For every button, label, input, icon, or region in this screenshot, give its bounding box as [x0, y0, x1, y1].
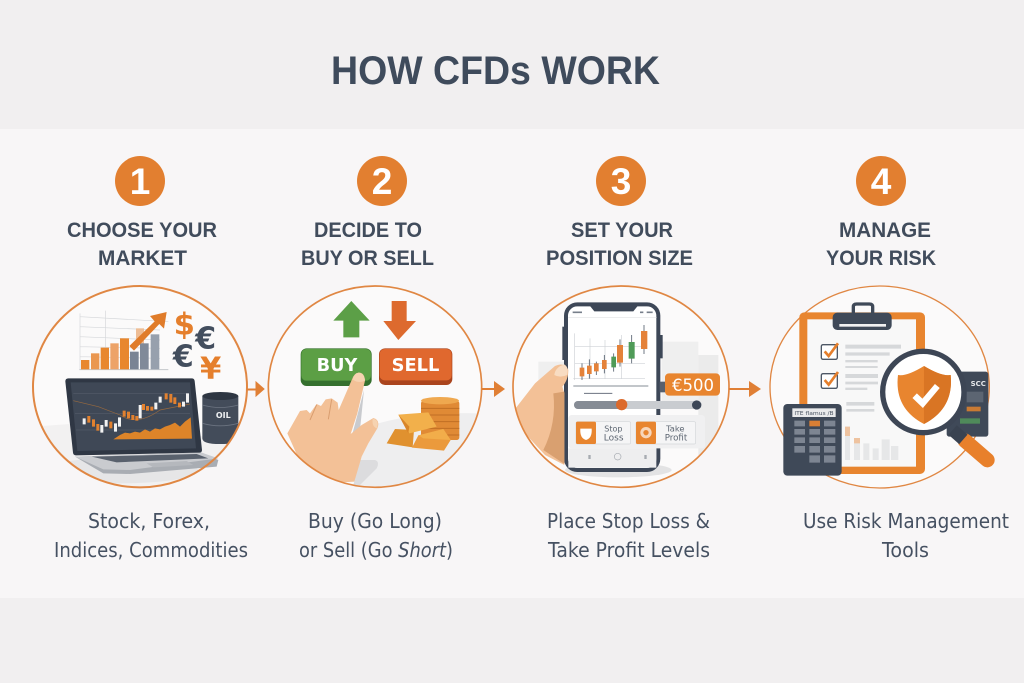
title: HOW CFDs WORK: [331, 49, 660, 93]
currency symbols: [172, 308, 221, 386]
step 1 heading: CHOOSE YOUR: [67, 219, 217, 242]
step 2 heading: DECIDE TO: [314, 219, 422, 242]
step 3 number badge: 3: [611, 161, 631, 202]
step 3 heading: [546, 219, 693, 270]
left calculator: ITE flamus /B: [794, 411, 834, 417]
euro amount badge: €500: [672, 376, 714, 395]
step 1 description: Stock, Forex,: [88, 509, 210, 533]
step 1 heading: [67, 219, 217, 270]
arrow 3 to 4: [729, 381, 761, 397]
step 2 heading: BUY OR SELL: [301, 247, 434, 270]
down arrow: [383, 301, 416, 340]
step 4 number badge: [856, 156, 906, 206]
illustration 1: market circle: [33, 286, 253, 493]
step 4 heading: YOUR RISK: [826, 247, 936, 270]
step 3 description: Place Stop Loss &: [547, 509, 710, 533]
step 2 description: or Sell (Go Short): [299, 538, 453, 562]
right calculator behind magnifier: [947, 372, 988, 437]
step 1 number badge: [115, 156, 165, 206]
illustration 4: risk management circle: [770, 286, 989, 488]
sell button: [379, 348, 452, 385]
candlestick chart: [573, 325, 648, 393]
sell button: SELL: [392, 356, 439, 376]
step 4 heading: MANAGE: [839, 219, 931, 242]
step 1 number badge: 1: [130, 161, 150, 202]
position size slider: [574, 399, 702, 410]
currency symbols: $: [174, 308, 195, 343]
step 2 number badge: 2: [372, 161, 392, 202]
stop loss and take profit panel: [568, 415, 705, 448]
step 2 description: [299, 509, 453, 562]
step 3 heading: POSITION SIZE: [546, 247, 693, 270]
step 1 description: Indices, Commodities: [54, 538, 248, 562]
clipboard: [799, 304, 925, 474]
step 2 number badge: [357, 156, 407, 206]
circle outline: [268, 286, 482, 487]
step 4 heading: [826, 219, 936, 270]
circle outline: [513, 286, 729, 487]
oil barrel: [202, 392, 238, 444]
laptop with trading chart: [65, 378, 218, 474]
stop loss and take profit panel: Loss: [604, 434, 624, 444]
right calculator behind magnifier: SCC: [971, 380, 986, 388]
magnifying glass with shield: [883, 351, 987, 460]
oil barrel: OIL: [216, 411, 231, 420]
step 2 description: Buy (Go Long): [308, 509, 442, 533]
stop loss and take profit panel: Stop: [604, 424, 622, 433]
step 4 number badge: 4: [871, 161, 892, 202]
buy button: BUY: [317, 356, 358, 376]
arrow 2 to 3: [482, 381, 505, 397]
illustration 2: buy or sell circle: [268, 286, 482, 493]
step 4 description: Tools: [881, 538, 929, 562]
hand pressing buy: [287, 373, 378, 483]
buy button: [301, 348, 372, 386]
gold bars and coins: [387, 397, 459, 451]
step 4 description: [803, 509, 1009, 562]
bar chart with rising arrow: [79, 311, 168, 370]
stop loss and take profit panel: Take: [665, 424, 685, 434]
step 1 description: [54, 509, 248, 562]
step 4 description: Use Risk Management: [803, 509, 1009, 533]
hand holding phone: [512, 364, 568, 465]
step 3 number badge: [596, 156, 646, 206]
currency symbols: €: [194, 321, 216, 356]
stop loss and take profit panel: Profit: [665, 434, 688, 444]
illustration 3: position size circle: [512, 286, 729, 487]
step 2 heading: [301, 219, 434, 270]
step 3 description: Take Profit Levels: [547, 538, 710, 562]
arrow 1 to 2: [248, 382, 264, 396]
currency symbols: ¥: [200, 351, 221, 386]
up arrow: [333, 301, 370, 337]
smartphone: [562, 304, 663, 470]
step 3 heading: SET YOUR: [571, 219, 673, 242]
currency symbols: €: [172, 339, 194, 374]
step 1 heading: MARKET: [98, 247, 187, 270]
euro amount badge: [660, 373, 720, 396]
circle outline: [33, 286, 247, 487]
step 3 description: [547, 509, 710, 562]
left calculator: [783, 404, 842, 476]
